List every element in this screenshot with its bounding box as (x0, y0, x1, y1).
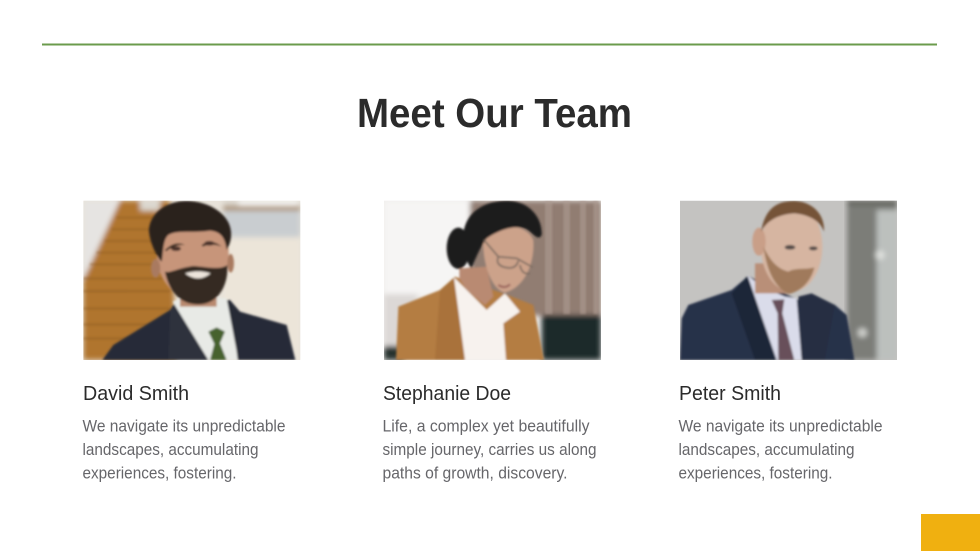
bio: David Smith: experiences, fostering. (82, 464, 236, 482)
team member: Peter Smith (678, 201, 897, 482)
name: Stephanie Doe: Stephanie Doe (383, 383, 511, 405)
name: Peter Smith: Peter Smith (679, 383, 781, 405)
bio: David Smith: We navigate its unpredictable (82, 416, 286, 436)
team member: David Smith (82, 201, 300, 482)
bio: Peter Smith: experiences, fostering. (678, 464, 832, 482)
bio: Stephanie Doe: simple journey, carries us along (382, 440, 596, 459)
bio: Stephanie Doe: paths of growth, discovery. (382, 464, 568, 482)
photo: David Smith (83, 201, 300, 360)
bio: David Smith: landscapes, accumulating (82, 440, 258, 459)
bio: Stephanie Doe (382, 416, 596, 482)
title: Meet Our Team (357, 90, 632, 136)
corner accent: yellow square (921, 514, 980, 551)
photo: Peter Smith (680, 201, 897, 360)
bio: Peter Smith: We navigate its unpredictable (678, 416, 882, 436)
photo: Stephanie Doe (384, 201, 601, 360)
top green rule (42, 44, 937, 46)
bio: David Smith (82, 416, 286, 482)
name: David Smith: David Smith (83, 383, 189, 405)
bio: Peter Smith (678, 416, 882, 482)
bio: Peter Smith: landscapes, accumulating (678, 440, 854, 459)
team member: Stephanie Doe (382, 201, 601, 482)
bio: Stephanie Doe: Life, a complex yet beautifully (382, 416, 590, 436)
